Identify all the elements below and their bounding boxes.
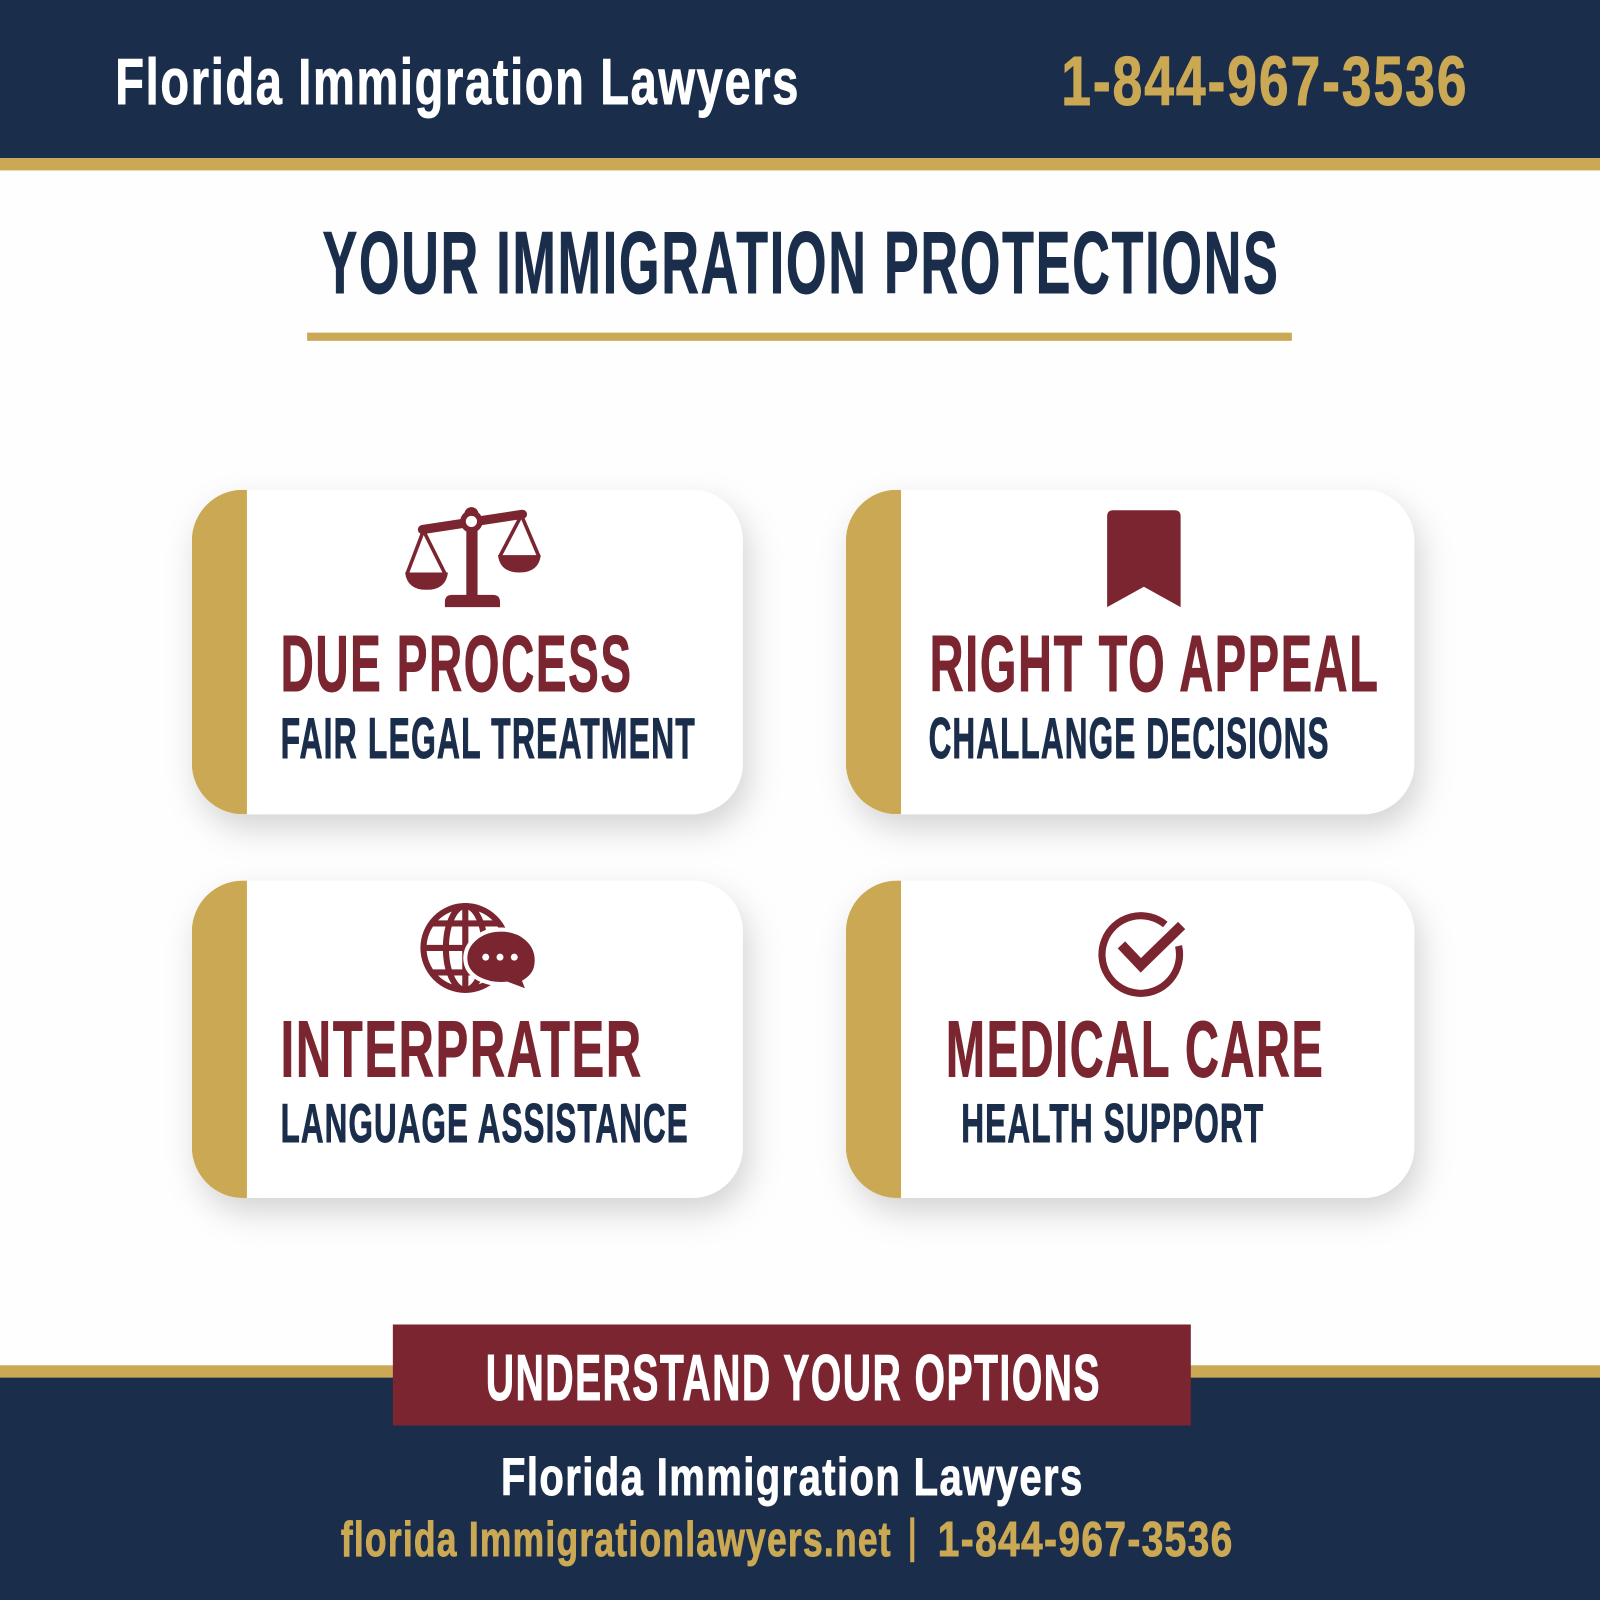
footer website and phone: florida Immigrationlawyers.net <box>341 1513 892 1567</box>
title <box>307 214 1292 341</box>
card subheading: FAIR LEGAL TREATMENT <box>281 707 696 771</box>
header firm name: Florida Immigration Lawyers <box>115 45 800 118</box>
footer firm name: Florida Immigration Lawyers <box>501 1448 1084 1507</box>
icon: check mark in circle <box>1102 916 1182 993</box>
footer band <box>0 1324 1600 1600</box>
panel: right to appeal <box>846 490 1414 814</box>
call to action banner <box>393 1324 1191 1426</box>
footer website and phone: 1-844-967-3536 <box>938 1513 1234 1567</box>
panel: due process <box>192 490 743 814</box>
card heading: DUE PROCESS <box>281 619 633 708</box>
call to action banner: UNDERSTAND YOUR OPTIONS <box>486 1341 1101 1414</box>
panel: interpreter <box>192 881 743 1198</box>
card subheading: LANGUAGE ASSISTANCE <box>281 1092 689 1154</box>
card subheading: HEALTH SUPPORT <box>961 1092 1264 1154</box>
icon: globe with speech bubble <box>423 906 537 992</box>
header phone number: 1-844-967-3536 <box>1061 42 1468 120</box>
card heading: MEDICAL CARE <box>946 1005 1324 1094</box>
header band <box>0 0 1600 170</box>
icon: bookmark <box>1107 510 1181 607</box>
panel: medical care <box>846 881 1414 1198</box>
card heading: INTERPRATER <box>281 1005 643 1094</box>
icon: scales of justice <box>405 507 541 607</box>
